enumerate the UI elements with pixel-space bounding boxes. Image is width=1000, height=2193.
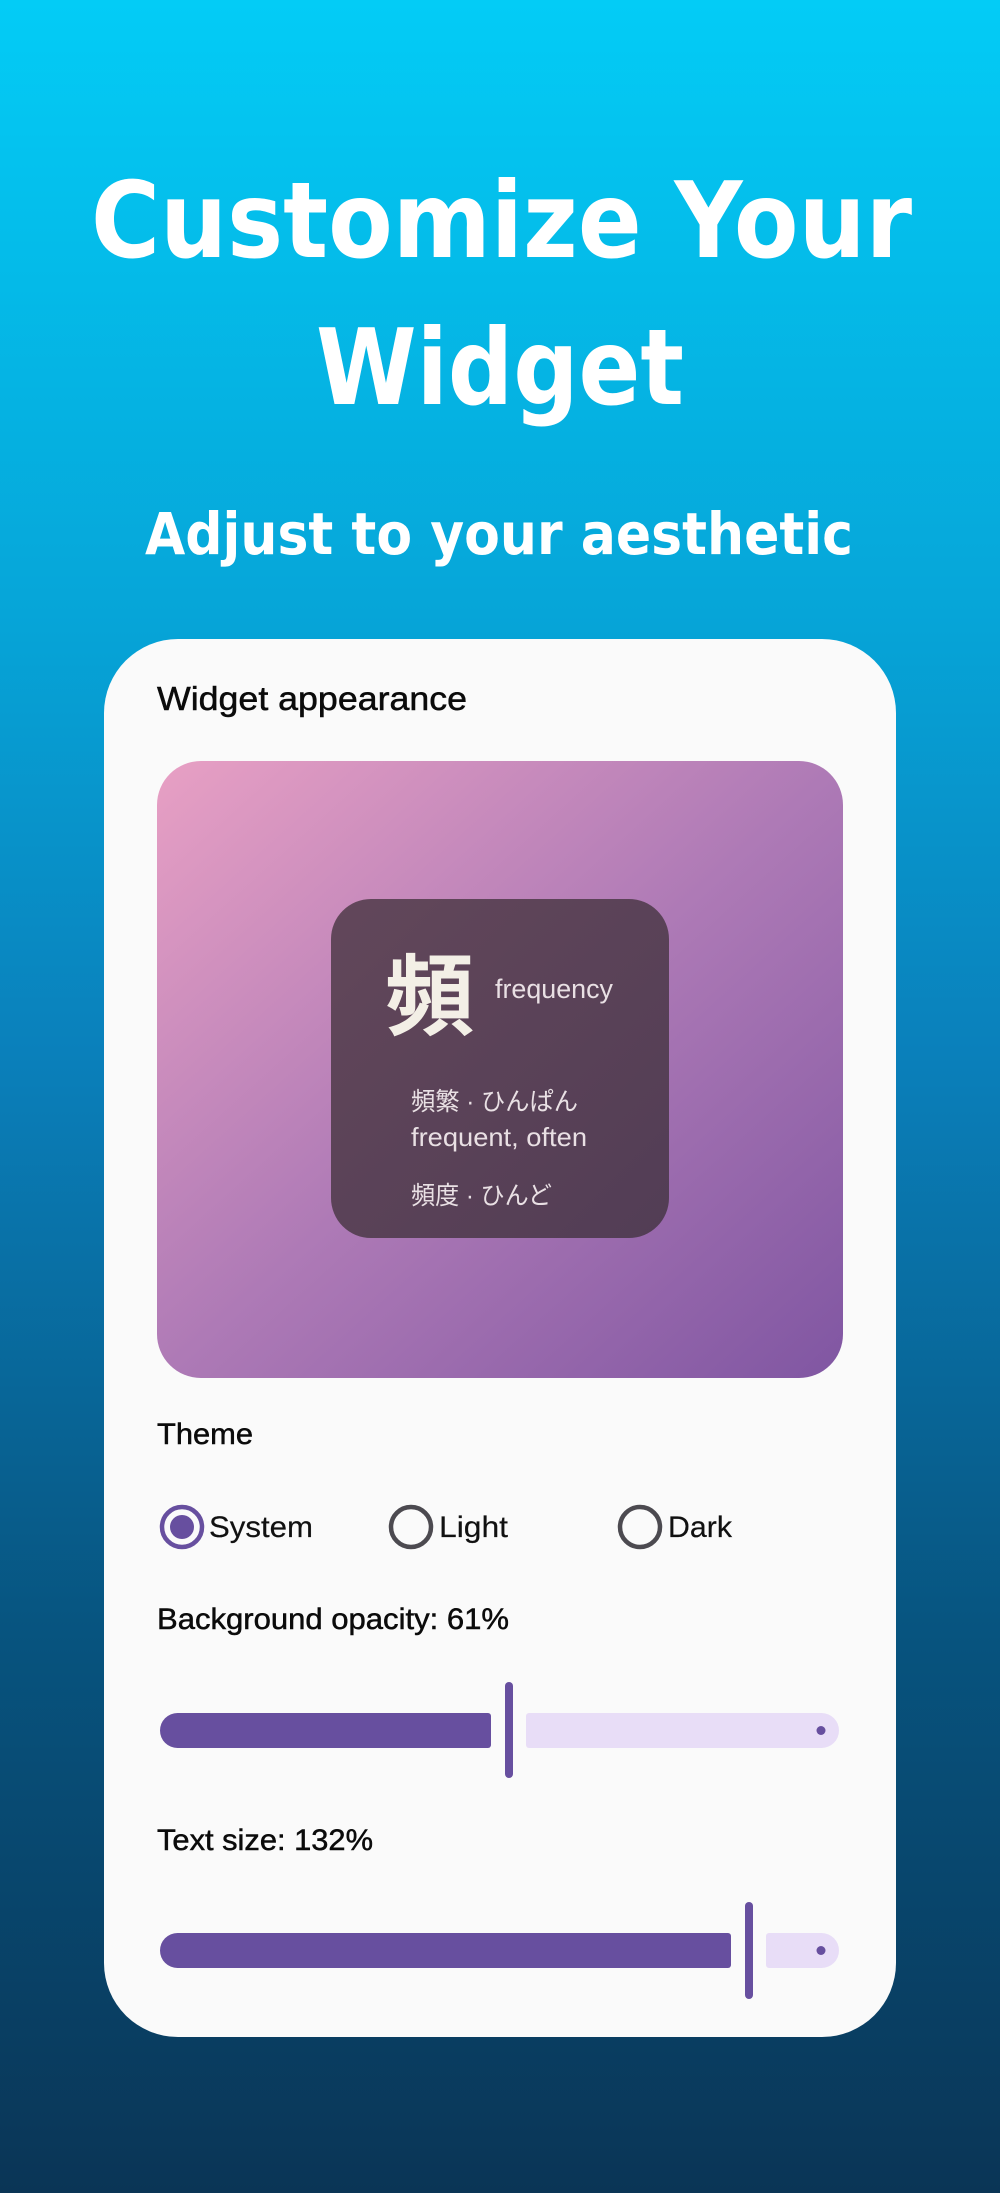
title: Customize Your [91, 160, 912, 282]
radio: light [391, 1507, 509, 1547]
vocabulary two: 頻度 · ひんど [411, 1182, 552, 1210]
slider: background opacity [160, 1682, 839, 1778]
label: background opacity: Background opacity: 61% [157, 1603, 509, 1636]
heading: theme: Theme [157, 1418, 253, 1451]
slider: text size [160, 1902, 839, 1999]
title: Widget [316, 307, 684, 429]
vocabulary one meaning: frequent, often [411, 1122, 587, 1152]
label: text size: Text size: 132% [157, 1824, 373, 1857]
kanji meaning: frequency [495, 974, 613, 1004]
widget tile [331, 899, 669, 1238]
vocabulary one: 頻繁 · ひんぱん [411, 1088, 578, 1116]
kanji: 頻 [385, 925, 474, 1054]
subtitle: Adjust to your aesthetic [145, 500, 853, 568]
radio: light: Light [439, 1511, 509, 1544]
heading: widget appearance: Widget appearance [157, 680, 467, 717]
panel: settings card [104, 639, 896, 2037]
panel: widget preview [157, 761, 843, 1378]
radio: dark: Dark [668, 1511, 733, 1544]
radio: system: System [209, 1511, 313, 1544]
radio: system [162, 1507, 313, 1547]
radio: dark [620, 1507, 733, 1547]
title [91, 160, 912, 429]
